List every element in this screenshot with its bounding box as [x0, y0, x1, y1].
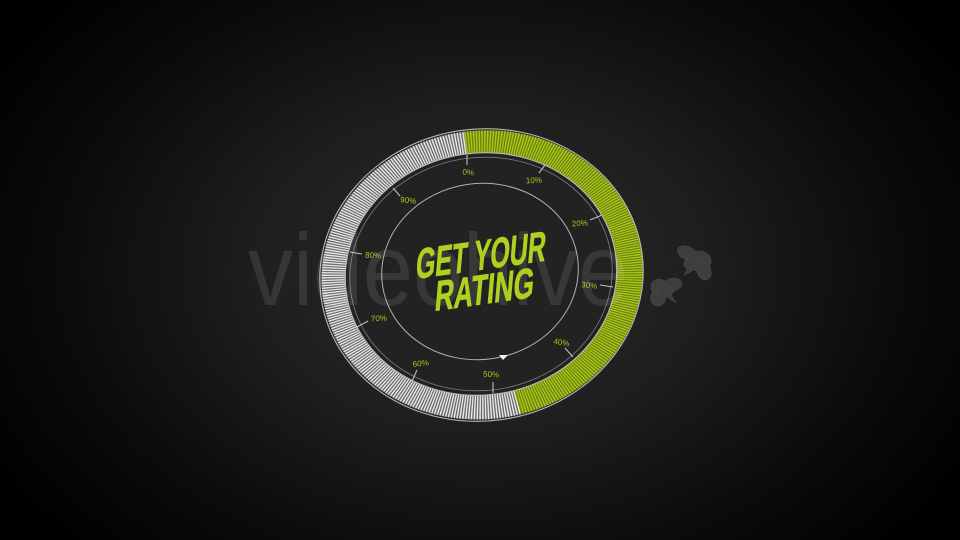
- title: RATING: [433, 259, 536, 321]
- rating dial: [301, 108, 662, 442]
- percentage labels: 40%: [553, 337, 570, 348]
- percentage labels: 70%: [371, 314, 387, 323]
- percentage labels: 30%: [581, 280, 598, 291]
- percentage labels: 50%: [483, 370, 499, 379]
- percentage labels: 20%: [572, 218, 588, 229]
- ring: filled green segment: [466, 126, 644, 402]
- icon: watermark logo: [650, 243, 714, 306]
- percentage labels: 10%: [526, 176, 542, 185]
- percentage labels: [365, 168, 598, 379]
- percentage labels: 90%: [400, 195, 417, 206]
- panel: dial face: [329, 135, 633, 413]
- ring outlines: [301, 108, 662, 442]
- title: GET YOUR: [414, 222, 548, 289]
- percentage ticks: [350, 155, 613, 393]
- inner circle: [370, 171, 590, 372]
- watermark wordmark: videohive: [248, 213, 628, 327]
- percentage labels: 80%: [365, 251, 381, 260]
- gauge ring: [320, 126, 644, 424]
- percentage labels: 60%: [412, 358, 429, 369]
- percentage labels: 0%: [462, 168, 474, 177]
- pointer marker: [499, 355, 508, 360]
- title: [414, 222, 548, 321]
- ring: remaining white segment: [320, 144, 517, 424]
